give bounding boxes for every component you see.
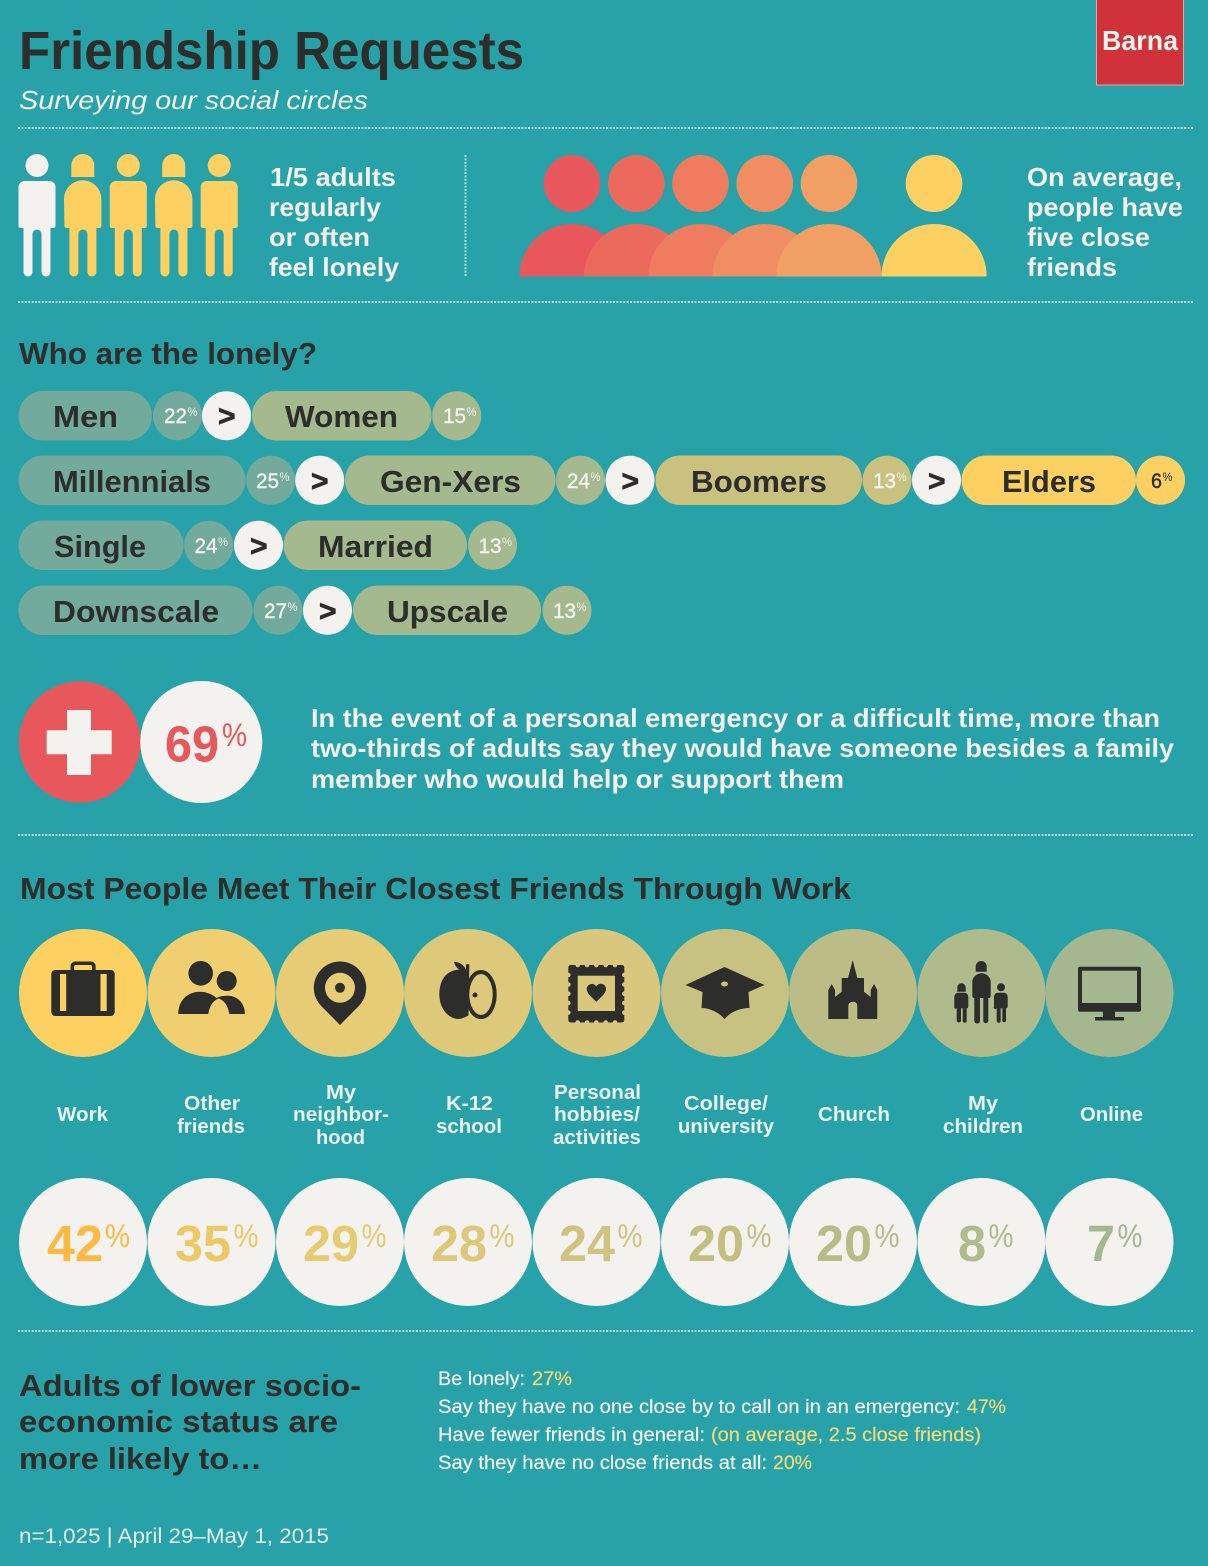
item: personal hobbies <box>532 929 660 1306</box>
item: K-12 school: 28 <box>431 1215 487 1272</box>
comparison row: generations: Boomers <box>691 464 827 499</box>
comparison row: generations: 24 <box>567 470 590 493</box>
item: work: Work <box>57 1104 109 1126</box>
icon: briefcase <box>51 962 115 1016</box>
item: personal hobbies: Personal <box>554 1082 641 1104</box>
comparison row: men vs women: Women <box>285 399 398 434</box>
text: 1/5 adults feel lonely: or often <box>269 222 370 252</box>
comparison row: generations: % <box>1162 470 1173 484</box>
comparison row: generations <box>18 456 1185 505</box>
comparison row: generations: 13 <box>873 470 896 493</box>
item: my children: % <box>988 1218 1014 1254</box>
list: lower socio-economic findings: 47% <box>967 1397 1006 1418</box>
stat: 69 percent <box>140 681 262 803</box>
icon: computer monitor <box>1078 967 1141 1020</box>
comparison row: generations: > <box>311 465 329 498</box>
item: work: 42 <box>47 1215 103 1272</box>
heading: most people meet closest friends through work: Most People Meet Their Closest Friends Through Work <box>20 871 852 906</box>
list: lower socio-economic findings: Say they have no one close by to call on in an emergency: <box>438 1397 960 1418</box>
comparison row: downscale vs upscale: % <box>288 600 298 614</box>
item: online <box>1046 929 1174 1306</box>
item: personal hobbies: % <box>618 1218 642 1254</box>
item: my children: My <box>968 1093 999 1115</box>
logo: Barna <box>1096 0 1184 85</box>
item: K-12 school <box>404 929 532 1306</box>
comparison row: single vs married: % <box>218 535 228 549</box>
icon: church building <box>828 960 877 1019</box>
item: my neighborhood: My <box>326 1082 357 1104</box>
item: my children <box>918 929 1046 1306</box>
text: 1/5 adults feel lonely: 1/5 adults <box>270 162 396 192</box>
comparison row: generations: Millennials <box>53 464 211 499</box>
comparison row: generations: Elders <box>1002 464 1096 499</box>
comparison row: single vs married: Married <box>318 529 433 564</box>
icon: five friends and one person <box>519 155 987 276</box>
comparison row: men vs women: % <box>188 405 198 419</box>
list: lower socio-economic findings: 27% <box>532 1369 572 1390</box>
item: college or university <box>661 929 789 1306</box>
item: my neighborhood: hood <box>316 1127 365 1149</box>
text: five close friends: people have <box>1027 192 1183 222</box>
item: my neighborhood: 29 <box>303 1215 359 1272</box>
comparison row: single vs married: 13 <box>478 535 502 558</box>
heading: adults of lower socio-economic status: more likely to… <box>19 1441 262 1476</box>
footnote: sample and dates: n=1,025 | April 29–May 1, 2015 <box>19 1525 329 1548</box>
list: lower socio-economic findings: Be lonely: <box>438 1369 525 1390</box>
item: church: Church <box>818 1104 890 1126</box>
comparison row: downscale vs upscale: > <box>319 595 337 628</box>
text: emergency statement: In the event of a personal emergency or a difficult time, more than <box>311 703 1160 733</box>
panel: emergency support <box>19 681 1175 803</box>
item: other friends: 35 <box>175 1215 231 1272</box>
icon: apple <box>439 962 495 1019</box>
item: church: % <box>874 1218 900 1254</box>
comparison row: downscale vs upscale <box>18 586 592 635</box>
comparison row: generations: % <box>280 470 290 484</box>
item: college or university: university <box>678 1116 775 1138</box>
text: emergency statement <box>311 703 1175 794</box>
icon: postage stamp with heart <box>566 963 627 1025</box>
item: my children: children <box>943 1116 1023 1138</box>
text: 1/5 adults feel lonely: regularly <box>269 192 382 222</box>
text: emergency statement: member who would help or support them <box>311 764 844 794</box>
comparison row: men vs women: % <box>466 405 477 419</box>
item: K-12 school: K-12 <box>446 1093 493 1115</box>
comparison row: men vs women <box>18 391 481 440</box>
icon: medical cross <box>19 681 140 803</box>
item: my children: 8 <box>958 1215 986 1272</box>
text: five close friends: friends <box>1027 252 1117 282</box>
list: lower socio-economic findings: 20% <box>773 1453 812 1474</box>
comparison row: downscale vs upscale: Downscale <box>53 594 219 629</box>
panel: average five close friends <box>519 155 1183 282</box>
comparison row: generations: % <box>590 470 601 484</box>
item: personal hobbies: activities <box>553 1127 641 1149</box>
item: church <box>789 929 917 1306</box>
list: lower socio-economic findings <box>438 1369 1006 1474</box>
text: five close friends: On average, <box>1027 162 1182 192</box>
comparison row: men vs women: > <box>218 400 236 433</box>
icon: map pin <box>314 962 366 1025</box>
item: other friends: friends <box>177 1116 245 1138</box>
comparison row: single vs married <box>18 520 517 570</box>
list: lower socio-economic findings: (on average, 2.5 close friends) <box>711 1425 981 1446</box>
comparison row: generations: Gen-Xers <box>380 464 521 499</box>
comparison row: generations: 25 <box>256 470 279 493</box>
item: other friends <box>148 929 276 1306</box>
item: other friends: Other <box>184 1093 240 1115</box>
text: emergency statement: two-thirds of adults say they would have someone besides a family <box>311 733 1175 763</box>
item: K-12 school: school <box>436 1116 502 1138</box>
comparison row: generations: 6 <box>1151 470 1162 493</box>
comparison row: men vs women: 15 <box>443 405 466 428</box>
panel: one in five adults lonely <box>18 154 400 282</box>
item: K-12 school: % <box>490 1218 514 1254</box>
item: college or university: % <box>746 1218 772 1254</box>
heading: adults of lower socio-economic status: Adults of lower socio- <box>19 1368 361 1403</box>
comparison row: single vs married: % <box>502 535 512 549</box>
item: college or university: College/ <box>684 1093 768 1115</box>
text: five close friends <box>1027 162 1183 282</box>
comparison row: generations: > <box>928 465 946 498</box>
comparison row: downscale vs upscale: % <box>576 600 587 614</box>
item: work: % <box>105 1218 130 1254</box>
item: other friends: % <box>234 1218 258 1254</box>
item: my neighborhood <box>276 929 404 1306</box>
comparison row: downscale vs upscale: 27 <box>264 600 287 623</box>
logo: Barna: Barna <box>1102 25 1178 56</box>
item: church: 20 <box>816 1215 872 1272</box>
comparison row: single vs married: Single <box>54 529 146 564</box>
text: 1/5 adults feel lonely <box>269 162 400 282</box>
comparison row: single vs married: 24 <box>194 535 218 558</box>
item: my neighborhood: % <box>362 1218 386 1254</box>
item: my neighborhood: neighbor- <box>293 1104 389 1126</box>
comparison row: generations: > <box>622 465 639 498</box>
icon: two friends <box>178 961 245 1014</box>
icon: row of five people, one highlighted <box>18 154 238 276</box>
text: 1/5 adults feel lonely: feel lonely <box>269 252 400 282</box>
item: college or university: 20 <box>688 1215 744 1272</box>
comparison row: men vs women: 22 <box>164 405 187 428</box>
item: work <box>19 929 147 1306</box>
icon: graduation cap <box>686 967 764 1019</box>
comparison row: single vs married: > <box>250 530 268 563</box>
heading: adults of lower socio-economic status: economic status are <box>19 1404 338 1439</box>
stat: 69 percent: 69 <box>165 716 219 772</box>
item: online: 7 <box>1087 1215 1115 1272</box>
item: online: % <box>1118 1218 1142 1254</box>
comparison row: generations: % <box>896 470 907 484</box>
icon: parent and two children <box>954 961 1008 1024</box>
list: lower socio-economic findings: Say they have no close friends at all: <box>438 1453 767 1474</box>
heading: adults of lower socio-economic status <box>19 1368 361 1476</box>
item: personal hobbies: hobbies/ <box>554 1104 640 1126</box>
comparison row: downscale vs upscale: 13 <box>553 600 576 623</box>
title: Friendship Requests <box>19 21 524 81</box>
comparison row: men vs women: Men <box>53 399 118 434</box>
heading: who are the lonely: Who are the lonely? <box>19 336 317 371</box>
comparison row: downscale vs upscale: Upscale <box>387 594 508 629</box>
list: lower socio-economic findings: Have fewer friends in general: <box>438 1425 705 1446</box>
stat: 69 percent: % <box>222 717 247 753</box>
item: personal hobbies: 24 <box>559 1215 616 1272</box>
subtitle: Surveying our social circles <box>19 85 368 115</box>
item: online: Online <box>1080 1104 1143 1126</box>
text: five close friends: five close <box>1027 222 1150 252</box>
